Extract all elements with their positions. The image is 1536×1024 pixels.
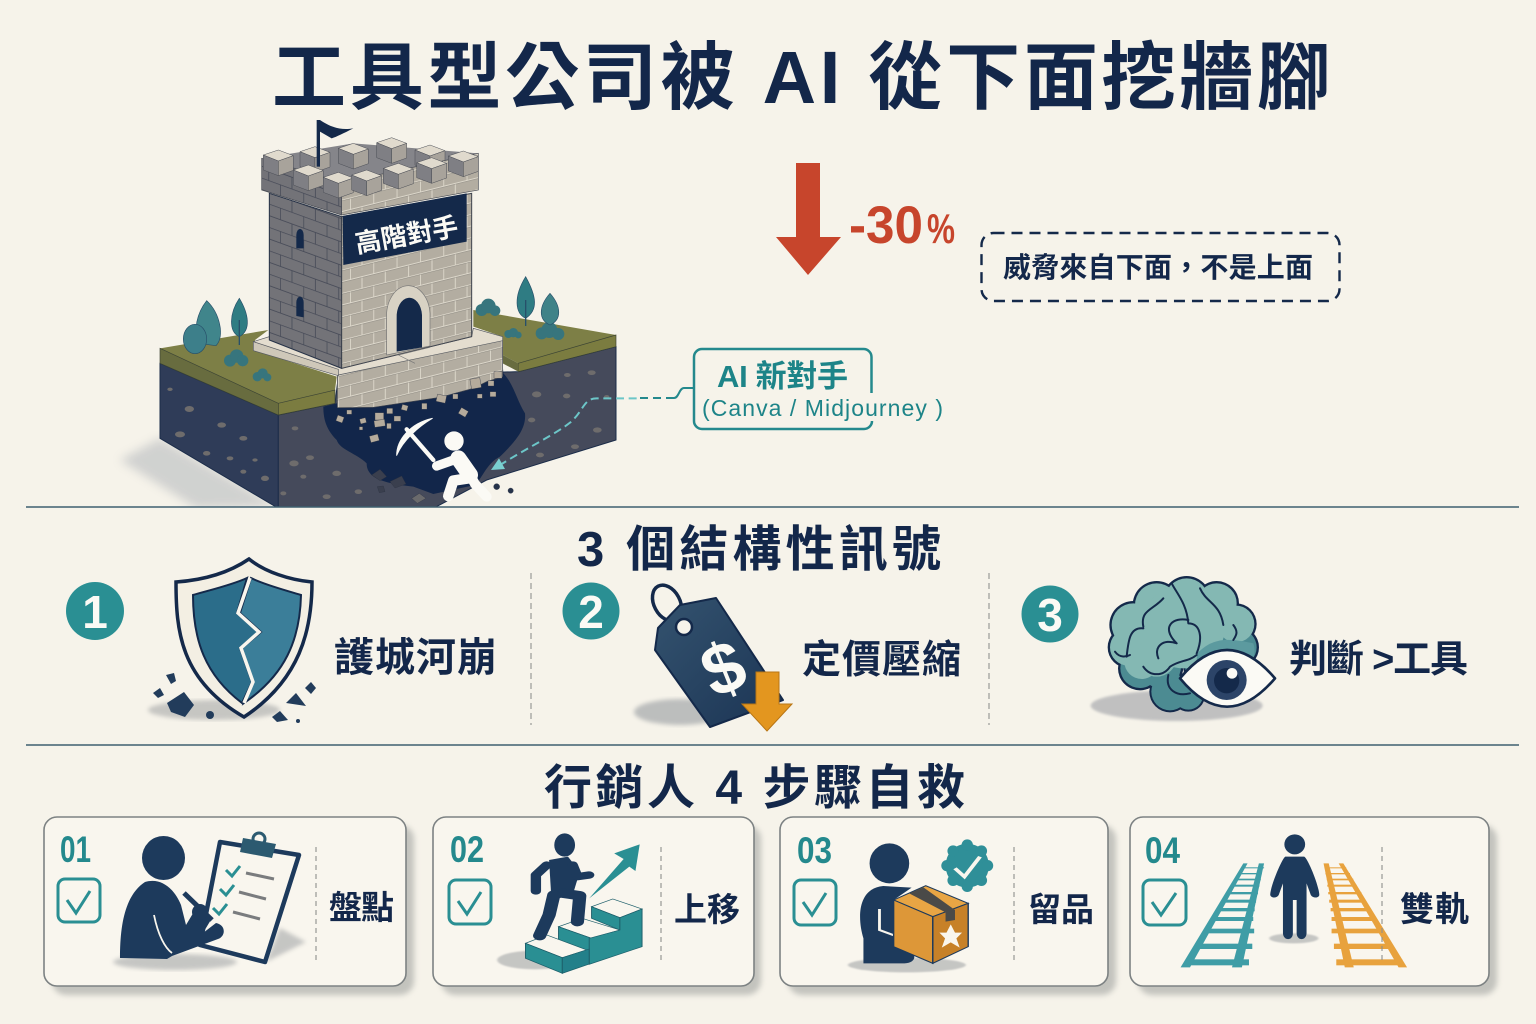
icon: price tag with down arrow — [634, 580, 792, 731]
tower walls — [269, 193, 472, 368]
teal rail — [1181, 863, 1264, 967]
card 01: inventory: 盤點 — [329, 889, 394, 926]
battlements — [262, 120, 478, 215]
tower banner — [343, 193, 467, 265]
signal 2 number — [562, 582, 620, 640]
heading: 4 self-rescue steps: 行銷人 4 步驟自救 — [544, 762, 965, 815]
signal 2 label: 定價壓縮 — [802, 639, 961, 682]
falling rubble — [336, 372, 513, 503]
signal 1 number: 1 — [82, 586, 108, 638]
icon: person holding box with badge — [848, 839, 993, 972]
card 04: dual track — [1130, 817, 1497, 995]
callout: threat from below — [982, 233, 1340, 301]
callout: new AI rival: (Canva / Midjourney ) — [702, 395, 943, 421]
signal 1 number — [66, 582, 124, 640]
stat: -30%: -30 — [849, 196, 923, 255]
card 03: retain products: 03 — [797, 830, 832, 871]
heading: 3 structural signals: 3 個結構性訊號 — [577, 523, 941, 577]
illustration: tower undermined by AI digger — [120, 120, 637, 508]
card 03: retain products: 留品 — [1028, 891, 1094, 928]
card 04: dual track: 雙軌 — [1400, 891, 1469, 929]
cyan dashed path inside soil — [491, 398, 637, 470]
callout: threat from below: 威脅來自下面，不是上面 — [1003, 252, 1313, 283]
signal 3 number — [1022, 586, 1078, 642]
signal 3 number: 3 — [1037, 589, 1063, 641]
arrow: down -30% — [776, 163, 841, 275]
signal 1 label: 護城河崩 — [334, 636, 497, 680]
title: 工具型公司被 AI 從下面挖牆腳 — [272, 36, 1331, 119]
stone platform — [253, 328, 503, 376]
banner label: 高階對手 — [353, 211, 460, 259]
ground: grass plots — [160, 310, 616, 415]
icon: climbing stairs with arrow — [497, 833, 642, 973]
icon: person with clipboard — [113, 833, 306, 970]
foundation wall — [337, 340, 503, 408]
icon: price tag with down arrow: $ — [690, 624, 757, 714]
orange rail — [1324, 863, 1407, 967]
digger with pickaxe — [397, 418, 487, 497]
ground: soil block — [160, 347, 616, 508]
card 03: retain products — [780, 817, 1116, 995]
tower door — [387, 286, 430, 363]
card 02: move up — [433, 817, 761, 995]
stat: -30%: % — [927, 205, 955, 252]
icon: cracked shield — [148, 559, 316, 723]
card 01: inventory: 01 — [60, 829, 91, 870]
tower windows — [296, 229, 304, 317]
card 02: move up: 上移 — [674, 891, 740, 928]
excavated cave — [323, 363, 525, 494]
callout: new AI rival — [638, 349, 943, 429]
callout: new AI rival: AI 新對手 — [717, 359, 848, 394]
icon: brain with eye — [1091, 576, 1275, 721]
signal 3 label: 判斷 >工具 — [1289, 639, 1468, 681]
card 02: move up: 02 — [450, 829, 484, 870]
card 04: dual track: 04 — [1145, 830, 1180, 871]
signal 2 number: 2 — [578, 586, 604, 638]
trees and bushes — [183, 277, 564, 381]
card 01: inventory — [44, 817, 414, 995]
icon: person between two rail tracks — [1181, 834, 1407, 967]
